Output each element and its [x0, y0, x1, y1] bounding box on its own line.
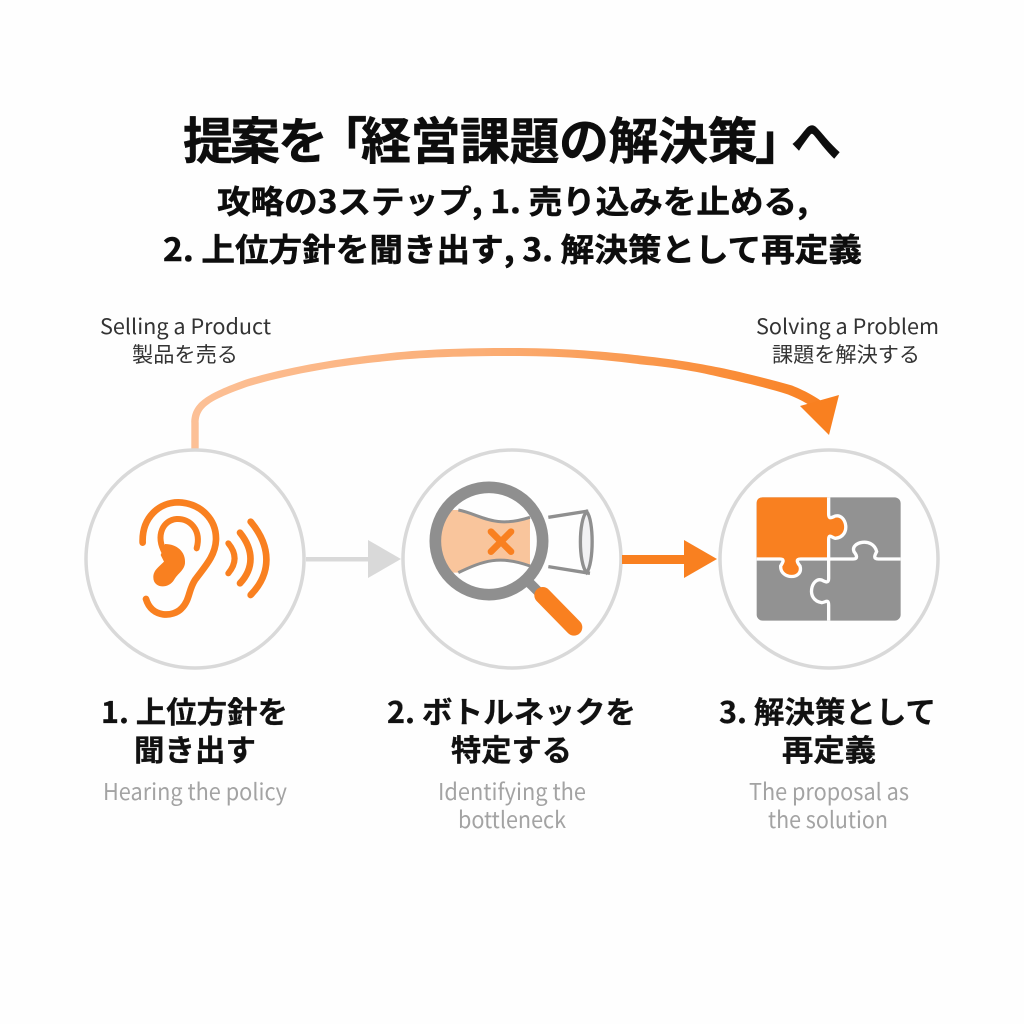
- arrow: step 1 to step 2: [306, 540, 401, 578]
- step 2 heading: [387, 688, 636, 770]
- label: selling a product: 製品を売る: [132, 339, 238, 369]
- label: selling a product: [100, 311, 271, 369]
- step 1 heading: 聞き出す: [134, 726, 256, 770]
- step 2 heading: 2. ボトルネックを: [387, 688, 636, 732]
- step 3 english caption: the solution: [768, 801, 888, 835]
- subtitle: [163, 177, 862, 271]
- step 3 heading: 再定義: [782, 726, 876, 770]
- step 2 heading: 特定する: [451, 726, 572, 770]
- step 2 english caption: [438, 773, 586, 835]
- arrow: curved from product to problem: [191, 348, 839, 450]
- label: solving a problem: [756, 311, 939, 369]
- label: solving a problem: 課題を解決する: [772, 339, 920, 369]
- panel: step 3 circle: [720, 450, 938, 668]
- label: selling a product: Selling a Product: [100, 311, 271, 341]
- step 1 heading: 1. 上位方針を: [101, 688, 288, 732]
- subtitle: 2. 上位方針を聞き出す, 3. 解決策として再定義: [163, 225, 862, 271]
- step 3 english caption: The proposal as: [749, 773, 909, 807]
- step 3 heading: 3. 解決策として: [719, 688, 936, 732]
- step 1 heading: [101, 688, 288, 770]
- icon: ear with sound waves: [143, 502, 266, 615]
- step 3 heading: [719, 688, 936, 770]
- icon: puzzle pieces: [757, 497, 901, 621]
- title: 提案を「経営課題の解決策」へ: [183, 102, 841, 174]
- step 1 english caption: Hearing the policy: [103, 773, 287, 807]
- subtitle: 攻略の3ステップ, 1. 売り込みを止める,: [217, 177, 808, 223]
- panel: step 2 circle: [403, 450, 621, 668]
- label: solving a problem: Solving a Problem: [756, 311, 939, 341]
- icon: magnifier over bottleneck: [435, 487, 592, 627]
- step 2 english caption: Identifying the: [438, 773, 586, 807]
- step 3 english caption: [749, 773, 909, 835]
- step 2 english caption: bottleneck: [458, 801, 566, 835]
- arrow: step 2 to step 3: [622, 540, 717, 578]
- panel: step 1 circle: [86, 450, 304, 668]
